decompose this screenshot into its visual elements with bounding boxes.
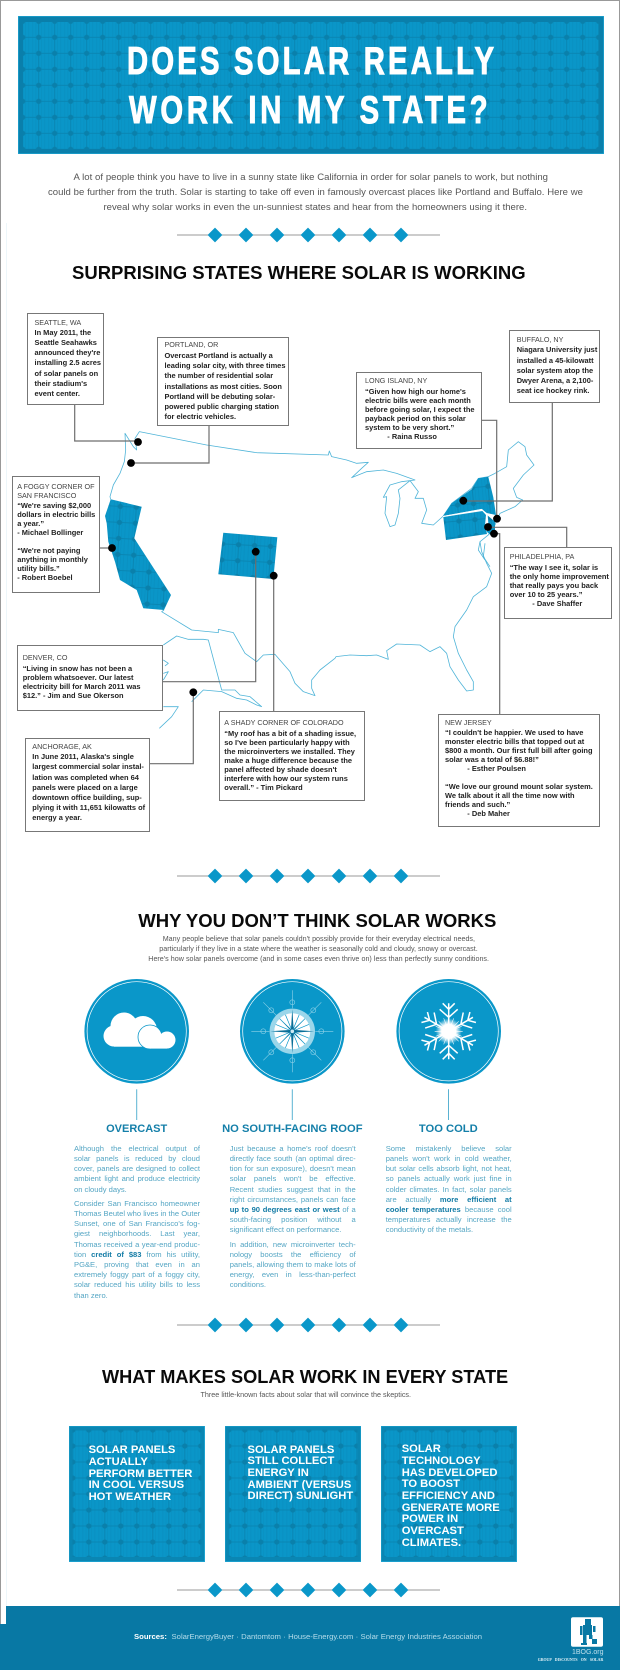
panel: technology fact: GENERATE MORE	[402, 1502, 500, 1514]
callout: Portland	[157, 337, 288, 426]
callout: foggy corner of San Francisco: dollars in electric bills	[17, 510, 95, 519]
panel: cool weather fact: PERFORM BETTER	[89, 1468, 192, 1480]
panel: cool weather fact: IN COOL VERSUS	[89, 1479, 184, 1491]
callout: Denver	[17, 645, 163, 711]
callout: Anchorage: In June 2011, Alaska's single	[32, 752, 134, 761]
callout: Anchorage: largest commercial solar instal-	[32, 762, 144, 771]
callout: Portland: for electric vehicles.	[164, 412, 236, 421]
callout: shady corner of Colorado	[219, 711, 365, 801]
column text: too cold: are actually more efficient at	[386, 1195, 512, 1204]
column text: no south-facing roof: In addition, new microinverter tech-	[230, 1240, 356, 1249]
panel: ambient sunlight fact: ENERGY IN	[248, 1467, 309, 1479]
callout: New Jersey: solar was a total of $6.88!”	[445, 755, 539, 764]
column text: overcast: Consider San Francisco homeowner	[74, 1199, 200, 1208]
callout: Buffalo: BUFFALO, NY	[517, 335, 563, 344]
column text: overcast: than zero.	[74, 1291, 108, 1300]
column heading: overcast: OVERCAST	[106, 1123, 167, 1135]
callout: foggy corner of San Francisco: SAN FRANCISCO “We're saving $2,000	[17, 491, 91, 510]
callout: New Jersey: friends and such.”	[445, 800, 510, 809]
callout: Philadelphia: - Dave Shaffer	[532, 599, 582, 608]
panel: cool weather fact: SOLAR PANELS	[89, 1444, 175, 1456]
intro paragraph: A lot of people think you have to live in a sunny state like California in order for solar panels to work, but nothing	[74, 172, 548, 183]
location dots	[108, 438, 501, 696]
divider	[177, 1582, 440, 1598]
callout: Philadelphia: over 10 to 25 years.”	[510, 590, 582, 599]
divider	[177, 868, 440, 884]
heading: surprising states: SURPRISING STATES WHERE SOLAR IS WORKING	[72, 262, 526, 283]
icon: compass in circle	[240, 979, 345, 1120]
heading: what makes solar work: WHAT MAKES SOLAR WORK IN EVERY STATE	[102, 1367, 508, 1387]
callout: New Jersey: We talk about it all the time now with	[445, 791, 575, 800]
column text: too cold: so panels actually work just fine in	[386, 1174, 512, 1183]
callout: Philadelphia	[504, 547, 612, 619]
footer band	[0, 1606, 620, 1670]
callout: foggy corner of San Francisco: - Michael Bollinger “We're not paying	[17, 528, 83, 555]
section intro: three little-known facts: Three little-known facts about solar that will convince the skeptics.	[200, 1390, 411, 1399]
column text: too cold: Some mistakenly believe solar	[386, 1144, 512, 1153]
column text: no south-facing roof: Recent studies suggest that in the	[230, 1185, 356, 1194]
callout: New Jersey	[438, 714, 600, 827]
callout: Anchorage: downtown office building, sup-	[32, 793, 142, 802]
divider	[177, 1318, 440, 1332]
panel: technology fact: OVERCAST	[402, 1525, 464, 1537]
column text: no south-facing roof: solar panels won't be effective.	[230, 1174, 356, 1183]
panel: technology fact: CLIMATES.	[402, 1537, 461, 1549]
icon: snowflake in circle	[396, 979, 501, 1120]
callout: Seattle: announced they're	[34, 348, 100, 357]
column text: no south-facing roof: conditions.	[230, 1280, 266, 1289]
callout: Buffalo: Niagara University just	[517, 345, 597, 354]
panel: technology fact: POWER IN	[402, 1513, 458, 1525]
column text: overcast: extremely foggy part of a foggy city,	[74, 1270, 200, 1279]
column text: too cold: panels won't work in cold weather,	[386, 1154, 512, 1163]
panel: technology fact: TO BOOST	[402, 1478, 460, 1490]
column text: no south-facing roof: nology boosts the efficiency of	[230, 1250, 356, 1259]
US map with highlighted states and connector lines	[74, 403, 568, 764]
column text: overcast: tion credit of $83 from his utility,	[74, 1250, 200, 1259]
callout: Buffalo: solar system atop the	[517, 366, 593, 375]
column text: no south-facing roof: significant effect on performance.	[230, 1225, 341, 1234]
callout: Portland: powered public charging station	[164, 402, 279, 411]
panel: cool weather fact: HOT WEATHER	[89, 1491, 171, 1503]
panel: technology fact: TECHNOLOGY	[402, 1455, 481, 1467]
column text: overcast	[74, 1144, 200, 1300]
column text: overcast: on cloudy days.	[74, 1185, 127, 1194]
panel: technology fact: HAS DEVELOPED	[402, 1467, 497, 1479]
section intro: why you don't think solar works: particularly if they live in a state where the weather is seasonally cold and cloudy, snowy or overcast.	[159, 945, 478, 953]
column text: overcast: solar reduced his utility bills to less	[74, 1280, 200, 1289]
column heading: too cold: TOO COLD	[419, 1123, 478, 1135]
callout: Buffalo: Dwyer Arena, a 2,100-	[517, 376, 593, 385]
heading: why you don't think solar works: WHY YOU DON’T THINK SOLAR WORKS	[138, 910, 496, 931]
callout: foggy corner of San Francisco: - Robert Boebel	[17, 573, 73, 582]
callout: Anchorage	[25, 738, 150, 832]
column text: overcast: giest neighborhoods. Last year,	[74, 1229, 200, 1238]
section intro: why you don't think solar works: Here's how solar panels overcome (and in some cases even thrive on) less than perfectly sunny conditions.	[148, 955, 489, 963]
column text: overcast: cover, panels are designed to collect	[74, 1164, 200, 1173]
callout: Long Island: electric bills were each month	[365, 396, 471, 405]
callout: shady corner of Colorado: interfere with how our system runs	[224, 774, 348, 783]
callout: Philadelphia: the only home improvement	[510, 572, 609, 581]
callout: shady corner of Colorado: A SHADY CORNER OF COLORADO “My roof has a bit of a shading issue,	[224, 718, 356, 738]
section intro: why you don't think solar works	[148, 935, 489, 963]
callout: Portland: PORTLAND, OR Overcast Portland is actually a	[164, 340, 273, 360]
column text: no south-facing roof: up to 90 degrees east or west of a	[230, 1205, 356, 1214]
column text: no south-facing roof: right circumstances, panels can face	[230, 1195, 356, 1204]
panel: ambient sunlight fact: SOLAR PANELS	[248, 1444, 334, 1456]
callout: Seattle: Seattle Seahawks	[34, 338, 97, 347]
column text: no south-facing roof: tion for sun exposure), doesn't mean	[230, 1164, 356, 1173]
column text: overcast: Thomas Beutel who lives in the Outer	[74, 1209, 200, 1218]
callout: New Jersey: monster electric bills that topped out at	[445, 737, 584, 746]
column text: too cold: conductivity of the metals.	[386, 1225, 473, 1234]
column text: too cold: colder climates. In fact, solar panels	[386, 1185, 512, 1194]
callout: Long Island: - Raina Russo	[387, 432, 437, 441]
column text: too cold: but solar cells absorb light, not heat,	[386, 1164, 512, 1173]
connector lines	[75, 402, 567, 764]
callout: Seattle: of solar panels on	[34, 369, 98, 378]
panel: technology fact: SOLAR	[402, 1443, 441, 1455]
callout: New Jersey: NEW JERSEY “I couldn't be happier. We used to have	[445, 718, 583, 737]
title banner	[18, 16, 604, 154]
logo: 1BOG: GROUP DISCOUNTS ON SOLAR	[538, 1658, 603, 1662]
callout: Denver: problem whatsoever. Our latest	[23, 673, 133, 682]
callout: New Jersey: - Esther Poulsen “We love our ground mount solar system.	[445, 764, 593, 791]
callout: Portland: Portland will be debuting solar-	[164, 392, 275, 401]
callout: Buffalo	[509, 330, 600, 403]
column text: too cold	[386, 1144, 512, 1234]
callout: Denver: $12.” - Jim and Sue Okerson	[23, 691, 124, 700]
callout: shady corner of Colorado: overall.” - Tim Pickard	[224, 783, 303, 792]
callout: foggy corner of San Francisco: utility bills.”	[17, 564, 60, 573]
callout: shady corner of Colorado: panel affected by shade doesn't	[224, 765, 337, 774]
callout: Denver: DENVER, CO “Living in snow has not been a	[23, 653, 132, 673]
section intro: why you don't think solar works: Many people believe that solar panels couldn't possibly provide for their everyday electrical needs,	[163, 935, 475, 943]
column heading: no south-facing roof: NO SOUTH-FACING ROOF	[222, 1123, 363, 1135]
callout: foggy corner of San Francisco: A FOGGY CORNER OF	[17, 482, 95, 491]
California	[105, 499, 171, 610]
callout: Anchorage: energy a year.	[32, 813, 82, 822]
callout: shady corner of Colorado: make a huge difference because the	[224, 756, 352, 765]
callout: Long Island: system to be very short.”	[365, 423, 454, 432]
column text: overcast: Although the electrical output of	[74, 1144, 200, 1153]
panel: cool weather fact	[69, 1426, 205, 1562]
title banner: DOES SOLAR REALLY	[127, 40, 497, 83]
callout: Portland: installations as most cities. Soon	[164, 382, 282, 390]
callout: Long Island: before going solar, I expect the	[365, 405, 475, 414]
column text: overcast: ambient light and produce electricity	[74, 1174, 200, 1183]
callout: Anchorage: plying it with 11,651 kilowatts of	[32, 803, 145, 812]
title banner: WORK IN MY STATE?	[129, 89, 491, 132]
callout: foggy corner of San Francisco: anything in monthly	[17, 555, 88, 564]
intro paragraph	[48, 172, 583, 213]
column text: no south-facing roof	[230, 1144, 356, 1289]
callout: Seattle: In May 2011, the	[34, 328, 91, 337]
callout: Denver: electricity bill for March 2011 was	[23, 682, 141, 691]
callout: Anchorage: lation was completed when 64	[32, 772, 139, 782]
callout: foggy corner of San Francisco: a year.”	[17, 519, 44, 528]
column text: no south-facing roof: energy, even in less-than-perfect	[230, 1270, 356, 1279]
panel: cool weather fact: ACTUALLY	[89, 1456, 148, 1468]
divider	[177, 228, 440, 242]
callout: shady corner of Colorado: so I've been particularly happy with	[224, 738, 350, 747]
map outlines	[110, 432, 534, 728]
panel: ambient sunlight fact	[225, 1426, 361, 1562]
column text: overcast: Thomas received a year-end produc-	[74, 1240, 200, 1249]
callout: Long Island: LONG ISLAND, NY “Given how high our home's	[365, 376, 466, 396]
callout: Buffalo: seat ice hockey rink.	[517, 386, 589, 395]
column text: overcast: Sunset, one of San Francisco's fog-	[74, 1219, 200, 1228]
callout: New Jersey: - Deb Maher	[467, 809, 510, 818]
callout: Seattle	[27, 313, 104, 405]
callout: Long Island: payback period on this solar	[365, 414, 466, 423]
callout: foggy corner of San Francisco	[12, 476, 100, 593]
panel: ambient sunlight fact: STILL COLLECT	[248, 1455, 334, 1467]
panel: technology fact: EFFICIENCY AND	[402, 1490, 495, 1502]
logo: 1BOG	[538, 1617, 604, 1662]
New York, Pennsylvania and New Jersey	[443, 477, 496, 540]
column text: no south-facing roof: south-facing position without a	[230, 1215, 356, 1224]
callout: Seattle: SEATTLE, WA	[34, 318, 81, 327]
callout: Long Island	[356, 372, 482, 449]
column text: overcast: PG&E, proving that even in an	[74, 1260, 200, 1269]
callout: Portland: the number of residential solar	[164, 371, 273, 380]
intro paragraph: could be further from the truth. Solar is starting to take off even in famously overcast places like Portland and Buffalo. Here we	[48, 187, 583, 198]
callout: Seattle: event center.	[34, 389, 80, 398]
sources line: Sources: SolarEnergyBuyer · Dantomtom · House-Energy.com · Solar Energy Industries Association	[134, 1632, 482, 1641]
column text: no south-facing roof: Just because a home's roof doesn't	[230, 1144, 356, 1153]
callout: Seattle: installing 2.5 acres	[34, 358, 101, 367]
panel: ambient sunlight fact: AMBIENT (VERSUS	[248, 1479, 351, 1491]
callout: Seattle: their stadium's	[34, 379, 87, 388]
callout: New Jersey: $800 a month. Our first full bill after going	[445, 746, 593, 755]
column text: too cold: temperatures actually increase the	[386, 1215, 512, 1224]
callout: Buffalo: installed a 45-kilowatt	[517, 356, 594, 365]
callout: Philadelphia: that really pays you back	[510, 581, 598, 590]
column text: no south-facing roof: directly face south (an optimal direc-	[230, 1154, 356, 1163]
panel: technology fact	[381, 1426, 517, 1562]
panel: ambient sunlight fact: DIRECT) SUNLIGHT	[248, 1490, 353, 1502]
callout: Portland: leading solar city, with three times	[164, 361, 285, 370]
callout: Anchorage: ANCHORAGE, AK	[32, 742, 92, 751]
column text: overcast: solar panels is reduced by cloud	[74, 1154, 200, 1163]
column text: no south-facing roof: panels, allowing them to make lots of	[230, 1260, 356, 1269]
intro paragraph: reveal why solar works in even the un-sunniest states and hear from the homeowners using it there.	[104, 202, 527, 213]
Colorado	[218, 533, 277, 579]
icon: clouds in circle	[84, 979, 189, 1120]
callout: Anchorage: panels were placed on a large	[32, 783, 138, 792]
logo: 1BOG: 1BOG.org	[572, 1649, 604, 1656]
column text: too cold: cooler temperatures because cool	[386, 1205, 512, 1214]
callout: shady corner of Colorado: the microinverters we installed. They	[224, 747, 355, 756]
callout: Philadelphia: PHILADELPHIA, PA “The way I see it, solar is	[510, 552, 598, 572]
